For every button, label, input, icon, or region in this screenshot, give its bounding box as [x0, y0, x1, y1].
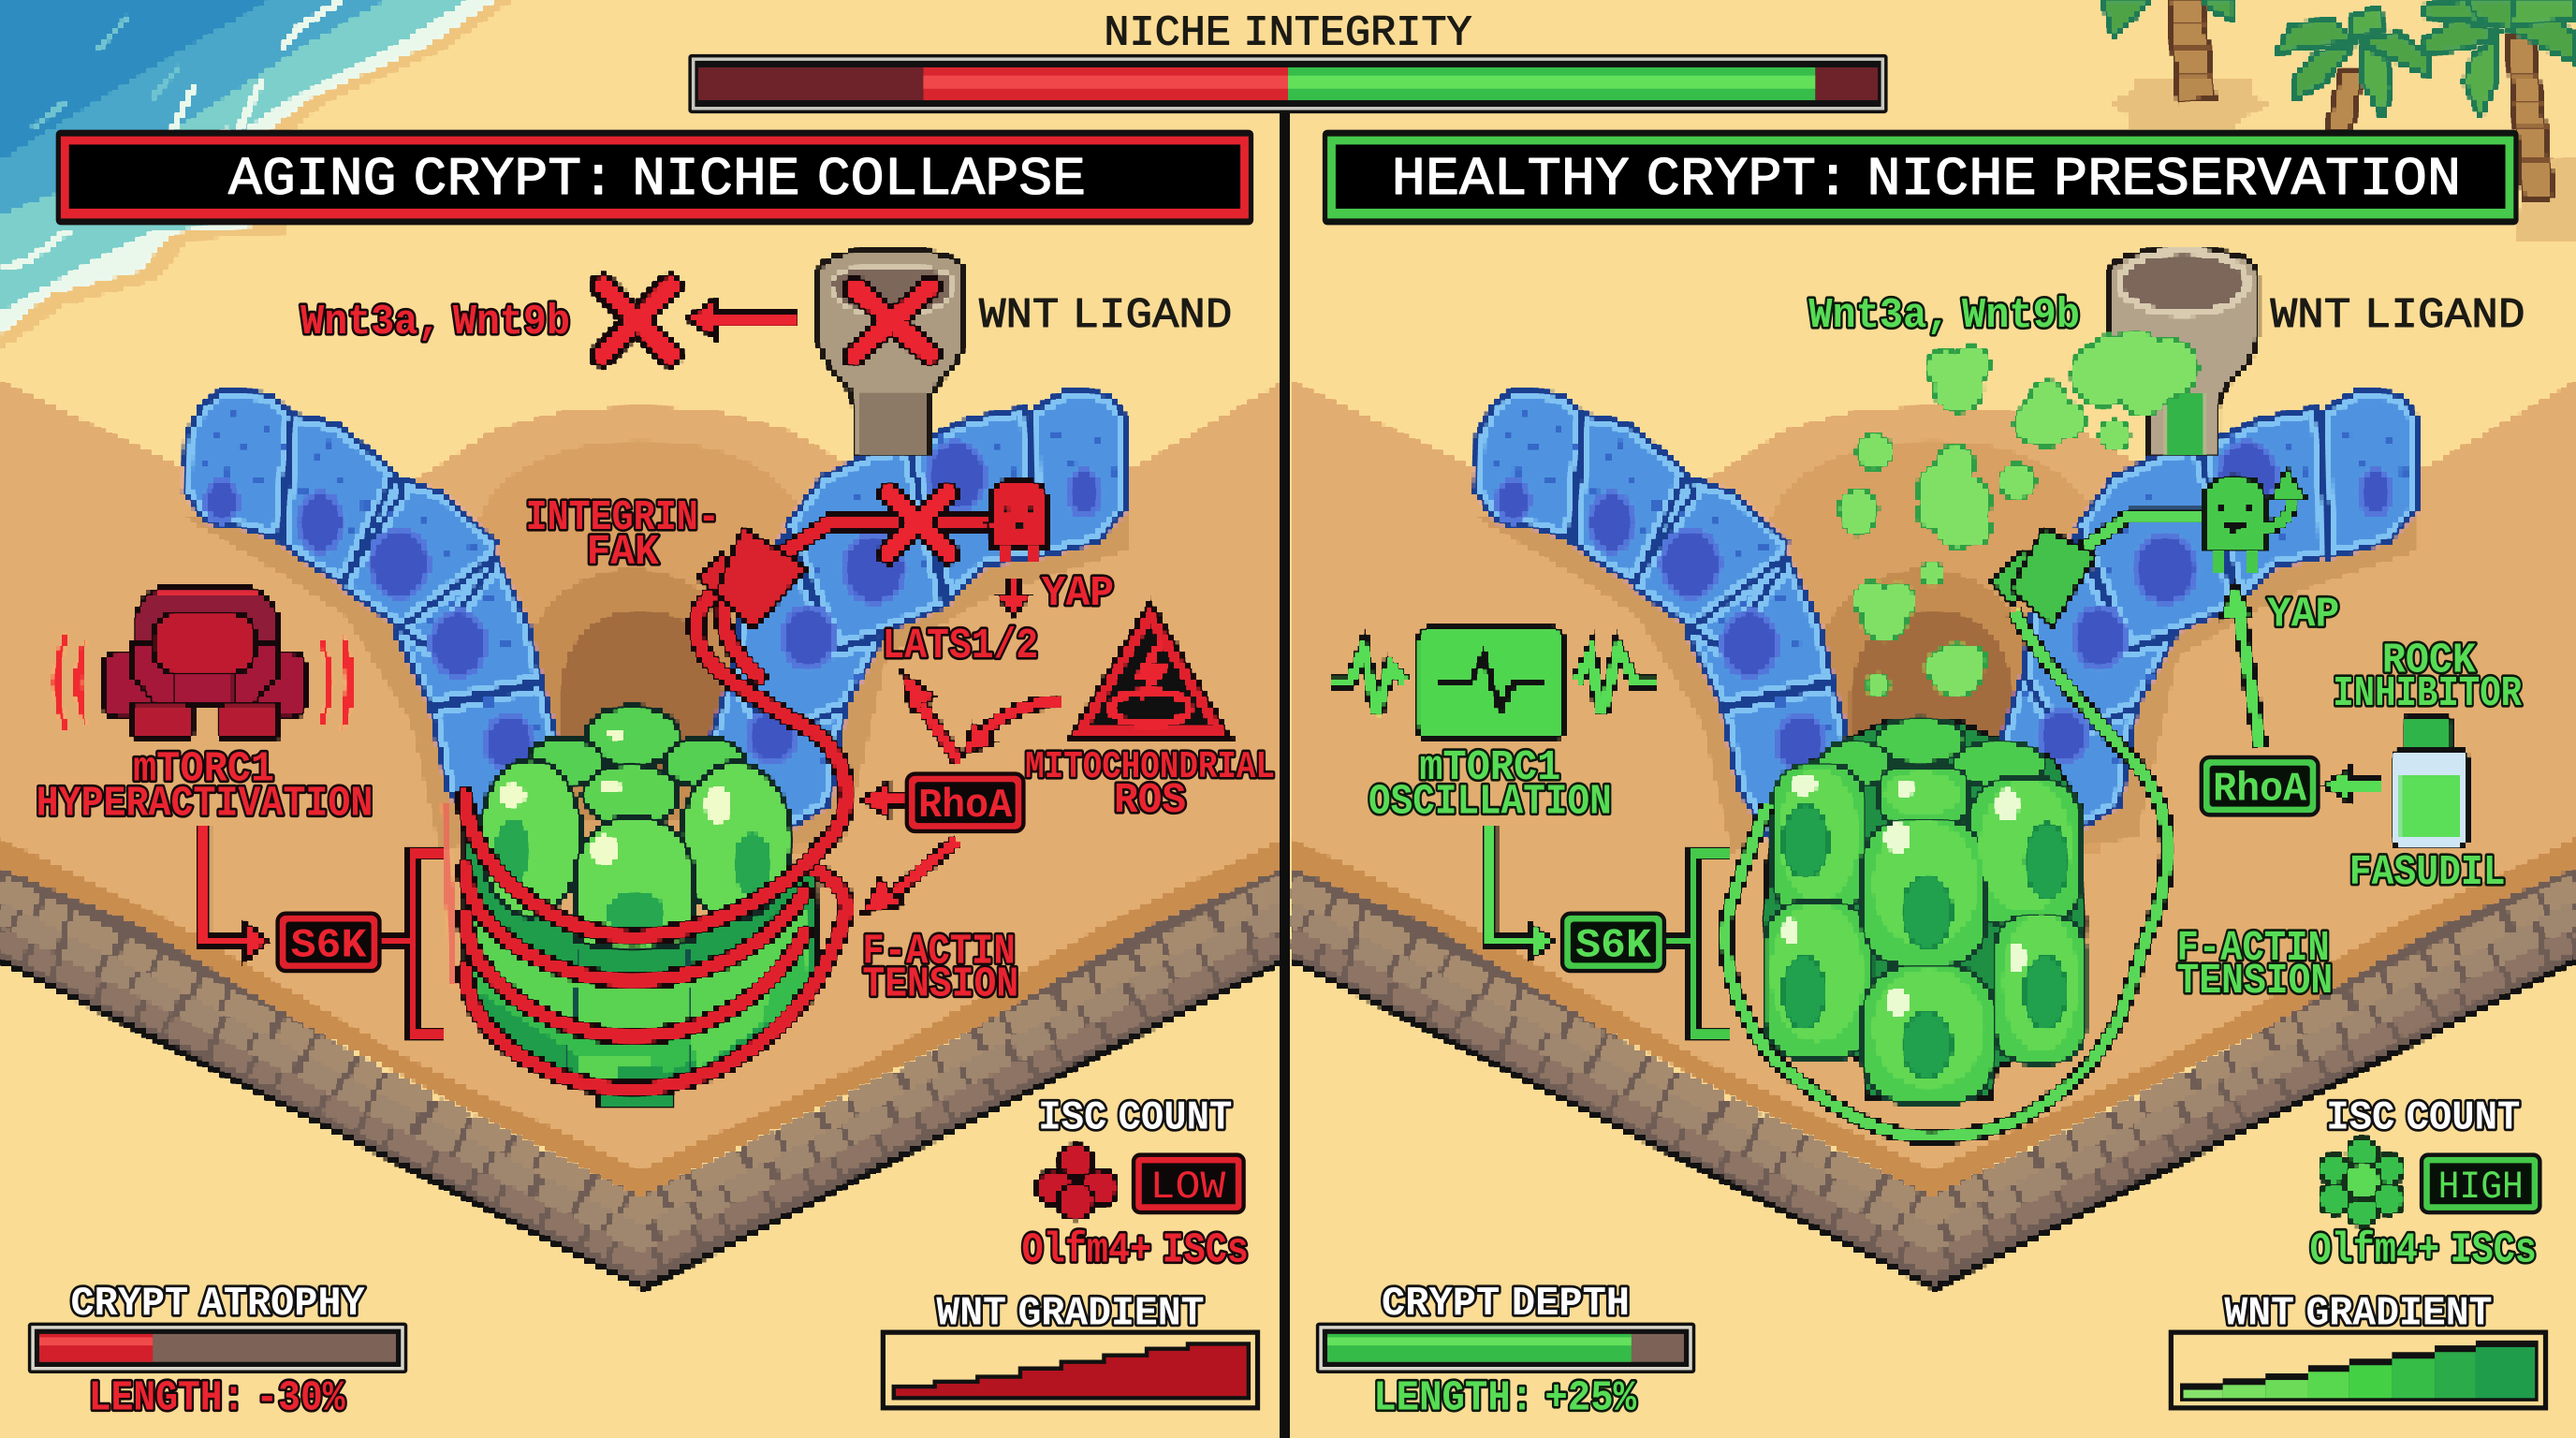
box: low: [1134, 1155, 1244, 1212]
label: ROCK inhibitor: [2333, 637, 2523, 718]
wnt particle puffs: [1840, 331, 2197, 695]
label: mTORC1 hyperactivation: [37, 745, 373, 828]
palm tree 3: [2422, 0, 2576, 243]
healthy labels layer: [1316, 130, 2546, 1423]
box: S6K red: [278, 914, 379, 971]
box: S6K green: S6K: [1575, 922, 1652, 969]
label: YAP red: YAP: [1042, 569, 1114, 618]
healthy artwork layer: [1292, 250, 2576, 1288]
box: low: LOW: [1150, 1165, 1226, 1210]
icon: wnt tube open: [2110, 250, 2258, 455]
arrow: RhoA to F-actin: [862, 840, 958, 914]
arrow: YAP to LATS: [997, 579, 1030, 618]
crypt terrain: healthy: [1292, 381, 2576, 1288]
label: ISC count: ISC COUNT: [1038, 1095, 1232, 1142]
organoid: healthy stem cells: [1763, 718, 2085, 1104]
ocean and shoreline: [0, 0, 513, 348]
label: integrin-FAK: [526, 493, 720, 577]
label: mitochondrial ROS: [1025, 746, 1275, 825]
arrow: fasudil to RhoA: [2323, 767, 2382, 803]
wnt ligand label: Wnt3a, Wnt9b: [300, 298, 570, 346]
wnt ligand label green: Wnt3a, Wnt9b: [1808, 291, 2080, 340]
bar: crypt depth: [1316, 1323, 1695, 1373]
palm tree 1: [2103, 0, 2269, 128]
label: wnt gradient: WNT GRADIENT: [936, 1290, 1204, 1337]
bracket: S6K red: [379, 853, 446, 1035]
label: mTORC1 oscillation: mTORC1: [1419, 743, 1560, 792]
f-actin wire loop: healthy: [1726, 516, 2210, 1137]
label: crypt atrophy: CRYPT ATROPHY: [70, 1281, 365, 1328]
arrow: mTORC1 to S6K green: [1490, 827, 1554, 961]
f-actin wire coils: aging: [465, 522, 986, 1089]
epithelial cells: healthy: [1475, 389, 2419, 838]
label: F-actin tension green: F-ACTIN: [2177, 924, 2330, 973]
top overlay: [688, 8, 1888, 113]
label: mTORC1 hyperactivation: HYPERACTIVATION: [37, 779, 373, 828]
label: YAP green: YAP: [2267, 591, 2339, 639]
clamp: integrin-FAK: [698, 527, 809, 629]
box: RhoA red: [907, 774, 1023, 831]
label: mitochondrial ROS: ROS: [1114, 776, 1186, 825]
title banner: healthy: HEALTHY CRYPT: NICHE PRESERVATION: [1392, 150, 2461, 211]
box: high: [2422, 1155, 2539, 1212]
icon: fasudil bottle: [2392, 716, 2467, 847]
label: mTORC1 hyperactivation: mTORC1: [133, 745, 274, 794]
label: F-actin tension green: TENSION: [2177, 957, 2333, 1005]
title banner: aging: [56, 130, 1253, 225]
label: integrin-FAK: FAK: [587, 528, 659, 577]
organoid: aging stem cells wrapped: [465, 707, 816, 1108]
panel: healthy crypt: [1292, 130, 2576, 1423]
label: mTORC1 oscillation: OSCILLATION: [1368, 778, 1612, 827]
icon: blocked X on YAP path: [889, 492, 948, 553]
icon: mitochondrial ROS warning: [1064, 596, 1236, 741]
icon: mTORC1 hyperactive: [54, 586, 353, 740]
label: Olfm4 ISCs green: Olfm4+ ISCs: [2310, 1226, 2537, 1275]
label: length -30%: LENGTH: -30%: [89, 1374, 345, 1423]
arrow: mTORC1 to S6K: [204, 827, 270, 961]
label: LATS1/2: LATS1/2: [882, 622, 1038, 670]
label: Olfm4 ISCs red: Olfm4+ ISCs: [1022, 1226, 1249, 1275]
arrow: ROS to RhoA: [962, 701, 1060, 756]
red stress glow: [446, 805, 453, 986]
box: S6K red: S6K: [291, 922, 367, 969]
box: RhoA green: RhoA: [2213, 767, 2307, 814]
label: F-actin tension red: F-ACTIN: [862, 927, 1016, 976]
icon: green ISC cluster: [2320, 1138, 2404, 1225]
icon: red ISC cluster: [1036, 1145, 1117, 1219]
label: integrin-FAK: INTEGRIN-: [526, 493, 720, 542]
scenery: ocean and palms: [0, 0, 2576, 348]
label: mitochondrial ROS: MITOCHONDRIAL: [1025, 746, 1275, 789]
icon: mTORC1 oscillation: [1331, 627, 1656, 740]
icon: blocked wnt X: [603, 286, 670, 355]
arrow: RhoA to YAP: [2219, 581, 2261, 749]
arrow: RhoA to LATS: [902, 672, 959, 762]
label: ISC count right: ISC COUNT: [2326, 1095, 2520, 1142]
niche integrity heading: NICHE INTEGRITY: [1104, 8, 1472, 57]
bracket: S6K green: [1664, 853, 1728, 1035]
label: ROCK inhibitor: INHIBITOR: [2333, 669, 2523, 718]
label: mTORC1 oscillation: [1368, 743, 1612, 827]
niche integrity bar: [688, 54, 1888, 113]
label: length +25%: LENGTH: +25%: [1373, 1374, 1637, 1423]
crypt terrain: aging: [0, 381, 1284, 1288]
label: fasudil: FASUDIL: [2349, 848, 2506, 897]
center divider: [1280, 112, 1290, 1438]
wnt ligand text right: WNT LIGAND: [2271, 291, 2525, 340]
icon: YAP character red: [986, 479, 1046, 564]
label: wnt gradient right: WNT GRADIENT: [2224, 1290, 2492, 1337]
chart: wnt gradient red: [883, 1332, 1258, 1408]
palm tree 2: [2277, 7, 2428, 131]
label: ROCK inhibitor: ROCK: [2382, 637, 2477, 685]
box: S6K green: [1562, 914, 1664, 971]
clamp: healthy integrin: [1989, 527, 2097, 627]
arrow: to X: [687, 299, 798, 338]
wnt ligand text: WNT LIGAND: [979, 291, 1232, 340]
box: RhoA green: [2202, 757, 2318, 814]
panel: aging crypt: [0, 130, 1284, 1423]
chart: wnt gradient green: [2171, 1332, 2546, 1408]
aging artwork layer: [0, 250, 1284, 1288]
label: F-actin tension green: [2177, 924, 2333, 1005]
label: F-actin tension red: TENSION: [862, 960, 1018, 1008]
box: high: HIGH: [2438, 1165, 2524, 1210]
label: crypt depth: CRYPT DEPTH: [1382, 1281, 1630, 1328]
box: RhoA red: RhoA: [918, 783, 1013, 829]
title banner: healthy: [1323, 130, 2519, 225]
title banner: aging: AGING CRYPT: NICHE COLLAPSE: [228, 150, 1086, 211]
icon: wnt tube blocked: [818, 250, 964, 455]
bar: crypt atrophy: [28, 1323, 407, 1373]
aging labels layer: [28, 130, 1275, 1423]
icon: YAP character green: [2203, 468, 2306, 572]
label: F-actin tension red: [862, 927, 1018, 1008]
epithelial cells: aging: [184, 389, 1127, 838]
arrow: RhoA to organoid: [861, 782, 907, 818]
